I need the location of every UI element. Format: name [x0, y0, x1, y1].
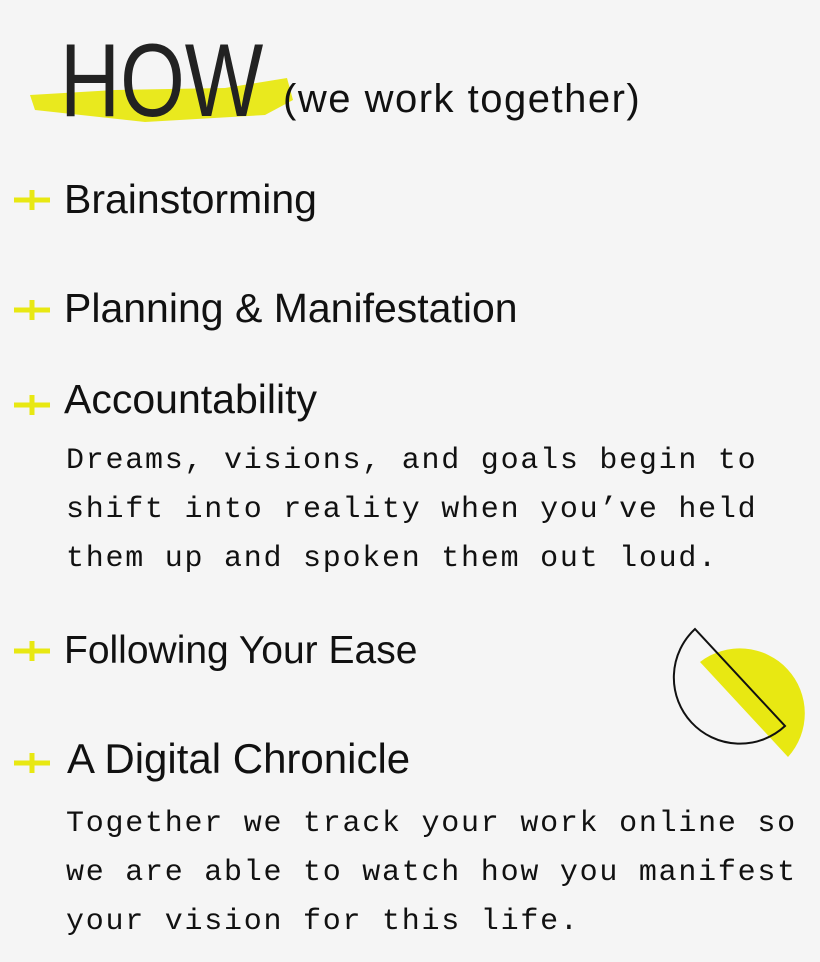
item: Planning: Planning & Manifestation: [64, 285, 518, 331]
text: chronicle description: Together we track your work online so we are able to watch how you manifest your vision for this life.: [66, 807, 797, 939]
icon: plus: [14, 641, 50, 661]
icon: plus: [14, 753, 50, 773]
subtitle: (we work together): [283, 77, 641, 121]
icon: plus: [14, 395, 50, 415]
item: Accountability: Accountability: [64, 376, 317, 422]
decorative semicircles: [672, 628, 805, 757]
item: A Digital Chronicle: A Digital Chronicle: [67, 735, 410, 782]
title: HOW: HOW: [60, 23, 263, 139]
icon: plus: [14, 190, 50, 210]
icon: plus: [14, 300, 50, 320]
item: A Digital Chronicle: [14, 735, 797, 939]
title brush stroke: [30, 78, 293, 122]
item: Accountability: [14, 376, 757, 576]
item: Following Your Ease: Following Your Ease: [64, 629, 417, 672]
text: accountability description: Dreams, visions, and goals begin to shift into reality when you’ve held them up and spoken them out loud.: [66, 444, 757, 576]
item: Brainstorming: Brainstorming: [64, 176, 317, 222]
